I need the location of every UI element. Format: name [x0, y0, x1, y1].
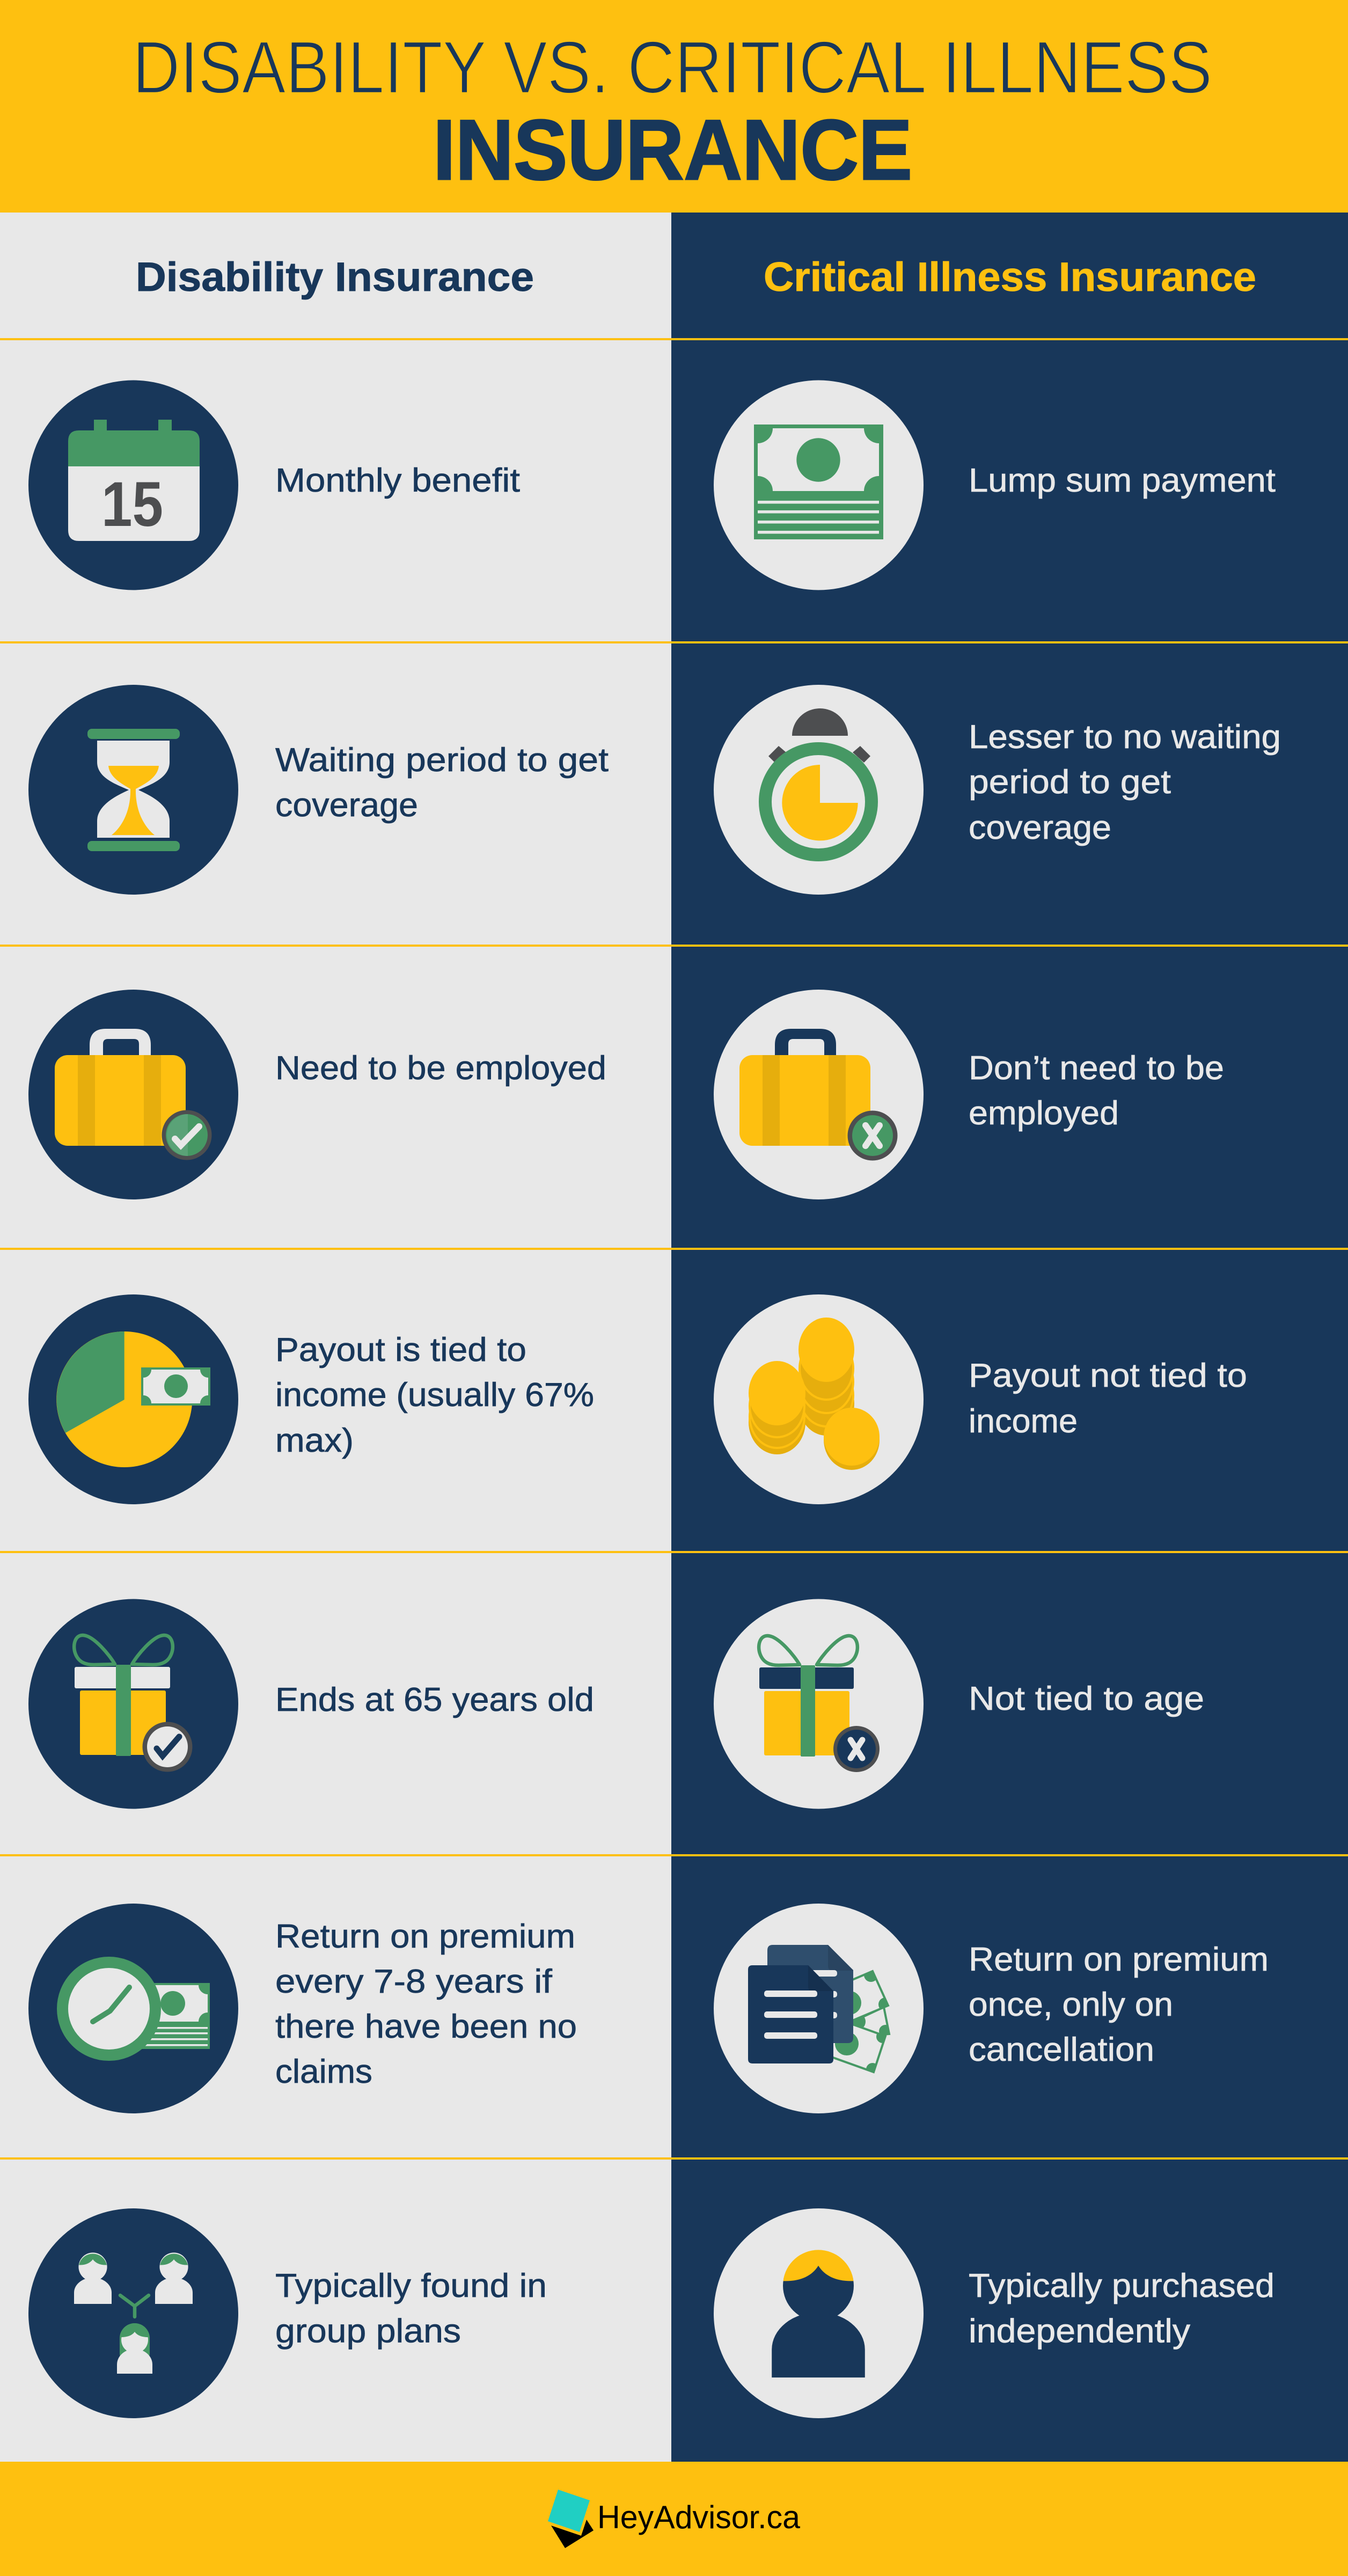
text: return on premium once: Return on premium	[969, 1941, 1269, 1978]
logo wordmark: HeyAdvisor.ca	[597, 2499, 801, 2535]
text: lesser to no waiting	[969, 719, 1281, 846]
icon: gift with cross	[714, 1599, 924, 1809]
text: lesser to no waiting: Lesser to no waiting	[969, 719, 1281, 756]
text: typically purchased independently	[969, 2267, 1274, 2350]
text: return on premium every 7-8 years: there have been no	[275, 2008, 577, 2045]
text: waiting period	[275, 742, 609, 824]
text: lump sum payment: Lump sum payment	[969, 462, 1276, 499]
icon: logo mark	[548, 2490, 594, 2548]
footer band with logo	[0, 2462, 1348, 2576]
text: lesser to no waiting: coverage	[969, 809, 1111, 846]
text: payout tied to income: max)	[275, 1422, 354, 1459]
text: don't need to be employed: employed	[969, 1095, 1119, 1132]
panel: left column background	[0, 212, 671, 2462]
title line 2: INSURANCE	[433, 102, 912, 197]
text: waiting period: coverage	[275, 787, 418, 824]
text: typically found in group plans: Typically found in	[275, 2267, 547, 2304]
text: payout tied to income: Payout is tied to	[275, 1331, 526, 1368]
icon: clock with money	[28, 1904, 238, 2113]
text: return on premium once	[969, 1941, 1269, 2068]
icon: briefcase with check	[28, 990, 238, 1199]
icon: documents with banknotes	[714, 1904, 924, 2113]
text: payout tied to income	[275, 1331, 594, 1459]
text: return on premium every 7-8 years: claims	[275, 2053, 372, 2090]
icon: single person	[714, 2208, 924, 2418]
icon: pie chart with banknote	[28, 1294, 238, 1504]
text: payout not tied: income	[969, 1403, 1078, 1440]
text: not tied to age: Not tied to age	[969, 1680, 1204, 1717]
text: return on premium every 7-8 years	[275, 1918, 577, 2090]
text: lesser to no waiting: period to get	[969, 764, 1171, 801]
icon: hourglass	[28, 685, 238, 895]
text: return on premium once: once, only on	[969, 1986, 1173, 2023]
icon: calendar	[28, 380, 238, 590]
heading: Disability Insurance: Disability Insurance	[136, 254, 534, 300]
text: return on premium every 7-8 years: every 7-8 years if	[275, 1963, 553, 2000]
icon: briefcase with cross	[714, 990, 924, 1199]
text: payout tied to income: income (usually 67%	[275, 1377, 594, 1414]
icon: gift with check	[28, 1599, 238, 1809]
text: typically found in group plans	[275, 2267, 547, 2350]
text: typically purchased independently: Typically purchased	[969, 2267, 1274, 2304]
icon: group of people	[28, 2208, 238, 2418]
icon: calendar: 15	[101, 469, 163, 540]
text: return on premium once: cancellation	[969, 2031, 1154, 2068]
text: payout not tied: Payout not tied to	[969, 1357, 1247, 1394]
text: payout not tied	[969, 1357, 1247, 1440]
text: typically purchased independently: independently	[969, 2313, 1190, 2350]
icon: money stack	[714, 380, 924, 590]
icon: stopwatch	[714, 685, 924, 895]
header band	[0, 0, 1348, 213]
text: don't need to be employed	[969, 1050, 1224, 1132]
title line 1: DISABILITY VS. CRITICAL ILLNESS	[133, 26, 1212, 109]
text: monthly benefit: Monthly benefit	[275, 462, 520, 499]
heading: Critical Illness Insurance: Critical Illness Insurance	[764, 254, 1256, 300]
panel: right column background	[671, 212, 1348, 2462]
text: don't need to be employed: Don’t need to be	[969, 1050, 1224, 1087]
text: need to be employed: Need to be employed	[275, 1050, 606, 1087]
text: typically found in group plans: group plans	[275, 2313, 461, 2350]
text: ends at 65 years old: Ends at 65 years old	[275, 1681, 594, 1718]
text: return on premium every 7-8 years: Return on premium	[275, 1918, 575, 1955]
icon: coin stacks	[714, 1294, 924, 1504]
text: waiting period: Waiting period to get	[275, 742, 609, 779]
